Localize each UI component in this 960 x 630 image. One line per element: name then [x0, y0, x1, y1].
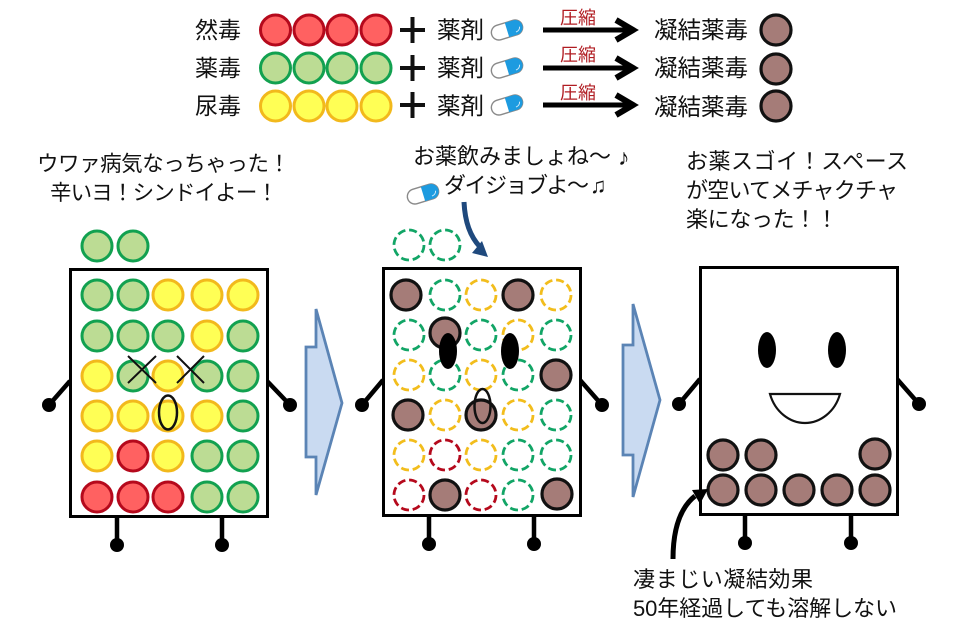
speech text: sick character: 辛いヨ！シンドイよー！ — [50, 181, 278, 205]
legend row: 尿毒: 凝結薬毒 — [654, 94, 748, 120]
speech text: medicine — [413, 144, 630, 198]
legend row: 薬毒: 凝結薬毒 — [654, 55, 748, 81]
speech text: relieved character: が空いてメチャクチャ — [686, 178, 898, 203]
face — [758, 332, 846, 423]
legend row: 然毒: 凝結薬毒 — [654, 17, 748, 43]
legend row: 然毒: 圧縮 — [560, 8, 596, 28]
block arrow 1 — [306, 309, 342, 495]
callout text — [633, 567, 897, 621]
legend row: 薬毒 — [195, 45, 791, 84]
legend row: 尿毒: 薬剤 — [437, 93, 484, 119]
speech text: sick character — [37, 152, 290, 205]
speech text: relieved character — [686, 149, 908, 232]
body — [70, 270, 268, 516]
speech text: relieved character: お薬スゴイ！スペース — [686, 149, 908, 174]
speech text: medicine: ♫ — [590, 173, 606, 198]
toxin grid — [391, 280, 572, 510]
speech text: medicine: お薬飲みましょね～ — [413, 144, 611, 169]
legend row: 然毒 — [195, 8, 791, 45]
speech text: sick character: ウワァ病気なっちゃった！ — [37, 152, 290, 176]
callout text: 50年経過しても溶解しない — [633, 596, 897, 621]
condensed toxins — [708, 439, 890, 505]
limbs — [42, 381, 297, 552]
legend row: 薬毒: 圧縮 — [560, 45, 596, 65]
speech text: relieved character: 楽になった！！ — [686, 207, 838, 232]
toxin grid — [82, 280, 258, 512]
legend row: 尿毒: 圧縮 — [560, 83, 596, 103]
limbs — [672, 379, 926, 550]
arrow: condensed toxin callout — [673, 489, 708, 559]
body — [384, 268, 580, 516]
callout text: 凄まじい凝結効果 — [633, 567, 813, 592]
icon: pill — [406, 182, 440, 206]
face: eyes and mouth — [439, 333, 519, 423]
block arrow 2 — [623, 304, 660, 497]
legend row: 然毒: 薬剤 — [437, 17, 484, 43]
legend row: 然毒: 然毒 — [195, 17, 241, 43]
character 3: happy — [672, 268, 926, 550]
arrow: medicine going in — [464, 202, 488, 257]
speech text: medicine: ダイジョブよ～ — [444, 173, 589, 198]
limbs — [355, 380, 609, 551]
character 1: sick — [42, 231, 297, 552]
legend row: 薬毒: 薬毒 — [195, 55, 241, 81]
legend row: 薬毒: 薬剤 — [437, 55, 484, 81]
legend row: 尿毒 — [195, 83, 791, 121]
floating toxins — [82, 231, 148, 261]
face: x eyes and mouth — [128, 356, 204, 430]
character 2: treated — [355, 230, 609, 551]
dissolved toxins outside — [394, 230, 460, 260]
body — [700, 268, 898, 514]
speech text: medicine: ♪ — [618, 144, 630, 170]
legend row: 尿毒: 尿毒 — [195, 93, 241, 119]
